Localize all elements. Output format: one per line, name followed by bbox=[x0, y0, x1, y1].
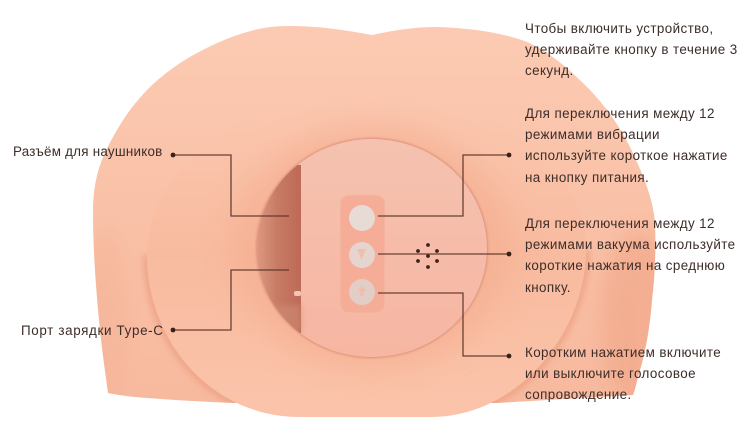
product diagram bbox=[93, 26, 656, 417]
text: vacuum modes: Для переключения между 12 bbox=[525, 216, 715, 231]
text: vibration modes: Для переключения между 12 bbox=[525, 106, 715, 121]
text: voice guidance: или выключите голосовое bbox=[525, 366, 696, 381]
text: power on: Чтобы включить устройство, bbox=[525, 21, 713, 36]
text: vibration modes bbox=[525, 106, 728, 185]
dark slot bbox=[257, 165, 301, 333]
body silhouette bbox=[93, 26, 656, 403]
text: power on bbox=[525, 21, 738, 78]
raised ring bbox=[147, 122, 586, 417]
text: voice guidance bbox=[525, 345, 721, 402]
button: vacuum bbox=[349, 242, 375, 268]
text: voice guidance: Коротким нажатием включите bbox=[525, 345, 721, 360]
label: Type-C port: Порт зарядки Type-C bbox=[21, 323, 164, 338]
leader dots bbox=[171, 153, 511, 358]
text: vibration modes: используйте короткое нажатие bbox=[525, 148, 728, 163]
text: vacuum modes: короткие нажатия на среднюю bbox=[525, 258, 725, 273]
text: voice guidance: сопровождение. bbox=[525, 387, 632, 402]
text: vibration modes: режимами вибрации bbox=[525, 127, 660, 142]
leader lines bbox=[173, 155, 508, 356]
circular recess with control panel bbox=[250, 138, 488, 358]
button: voice bbox=[349, 279, 375, 305]
button: power bbox=[349, 205, 375, 231]
label: headphone jack: Разъём для наушников bbox=[13, 144, 163, 159]
text: power on: секунд. bbox=[525, 63, 574, 78]
text: vacuum modes bbox=[525, 216, 735, 295]
text: vibration modes: на кнопку питания. bbox=[525, 170, 649, 185]
button strip bbox=[340, 195, 385, 313]
icon: microphone dots bbox=[416, 243, 439, 269]
text: vacuum modes: режимами вакуума используйте bbox=[525, 237, 735, 252]
text: power on: удерживайте кнопку в течение 3 bbox=[525, 42, 738, 57]
text: vacuum modes: кнопку. bbox=[525, 280, 571, 295]
